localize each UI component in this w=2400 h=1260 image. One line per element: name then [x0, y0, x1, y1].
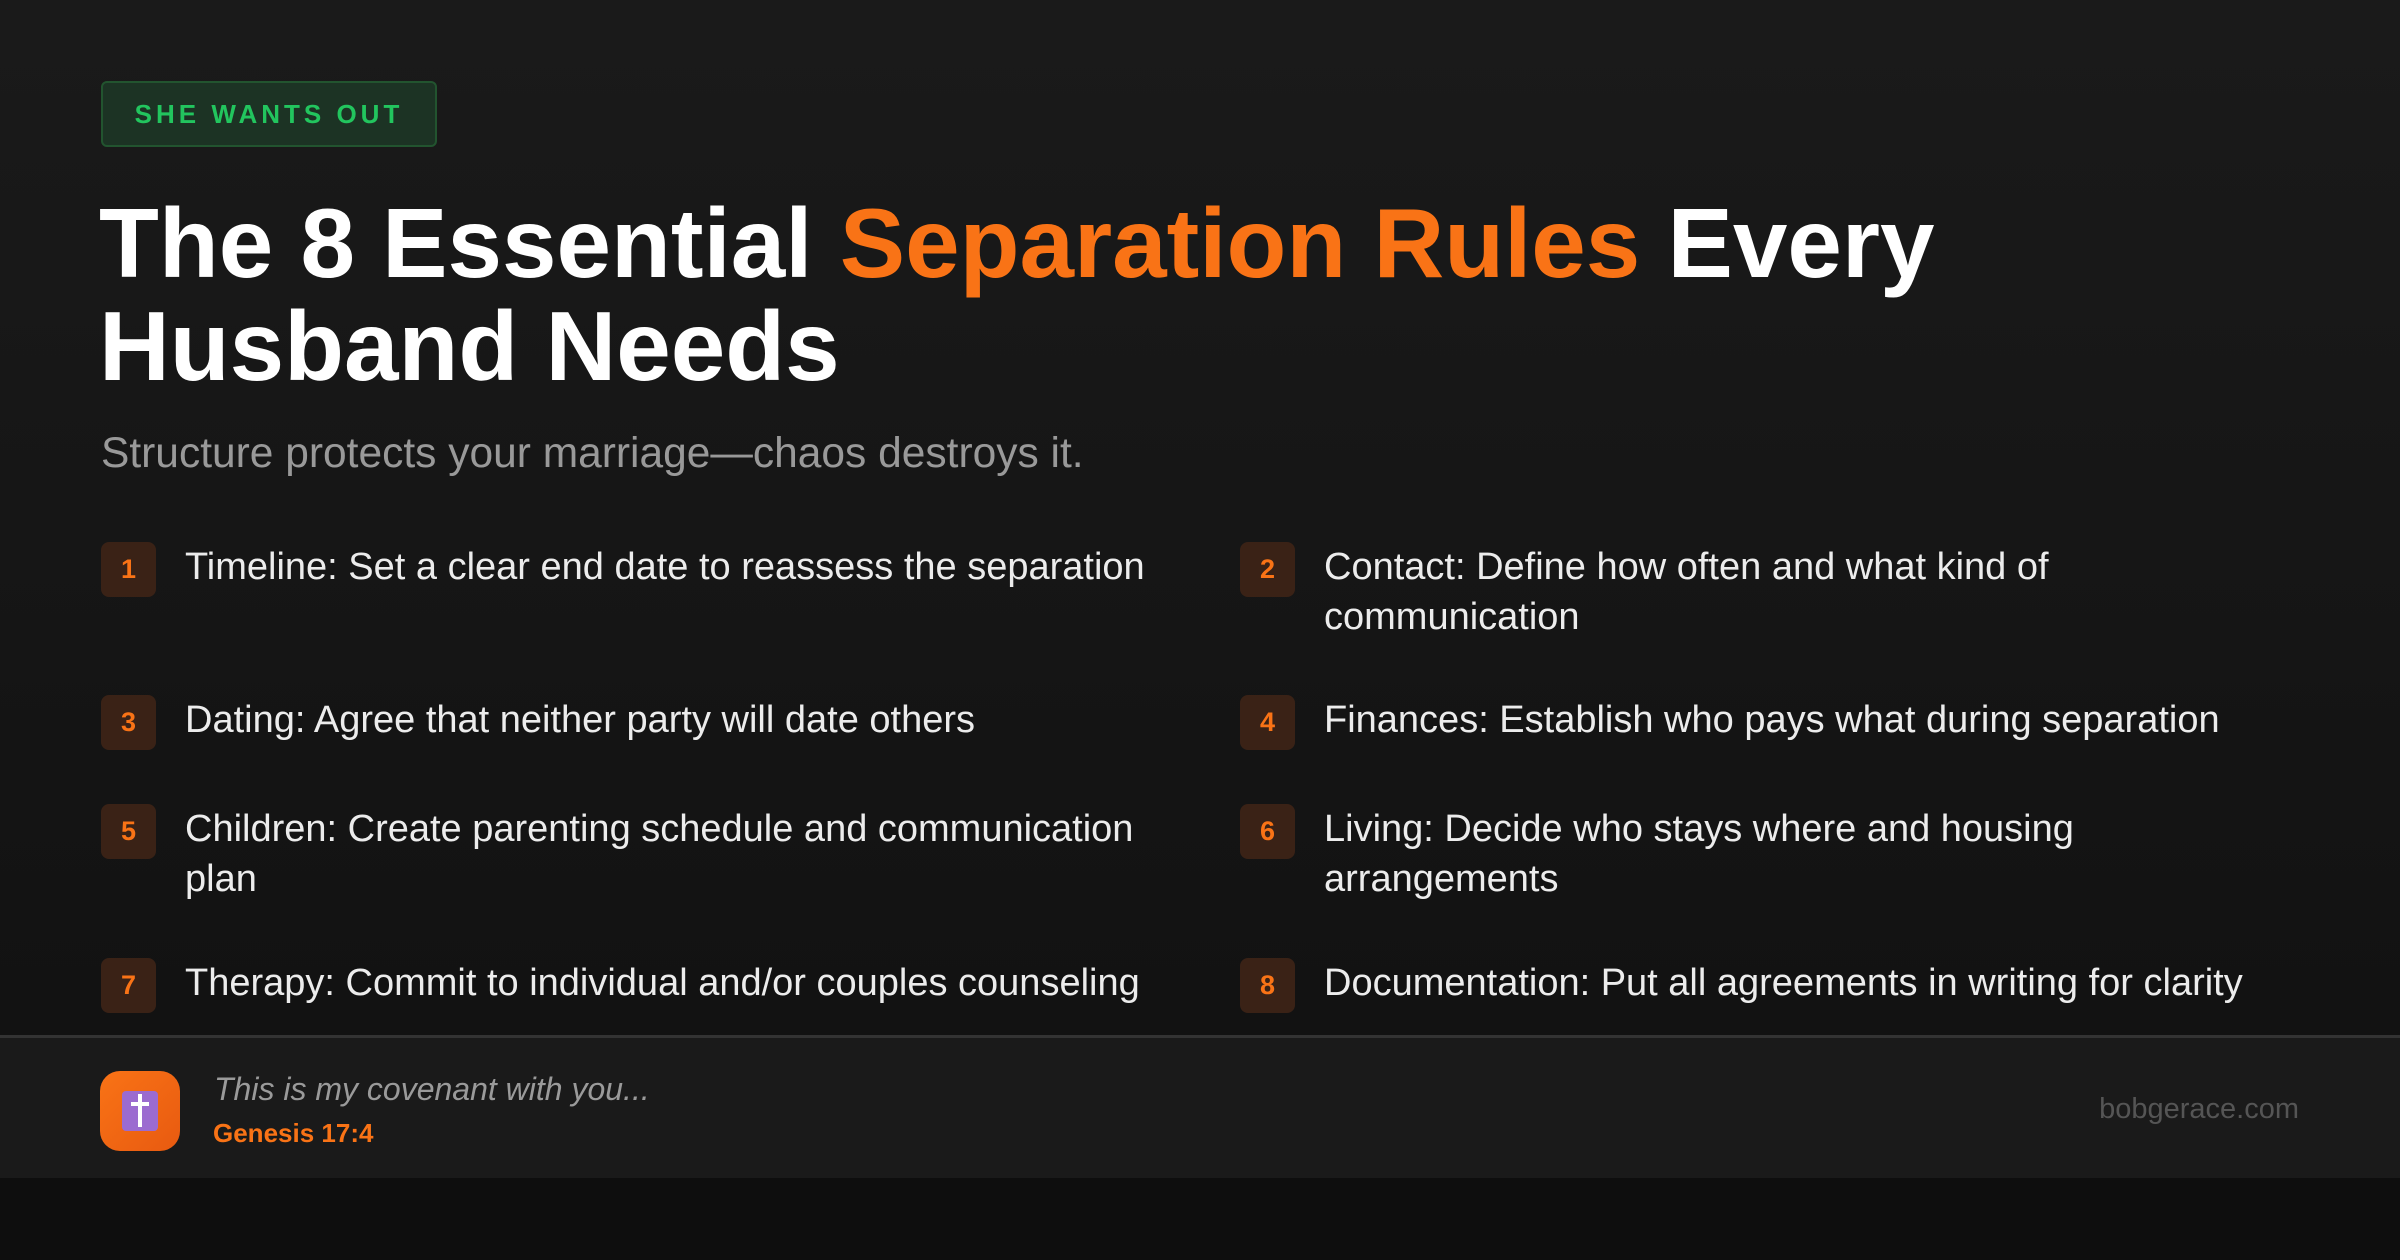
rule 8: Documentation: Put all agreements in writing for clarity — [1324, 962, 2243, 1004]
title: Husband Needs — [99, 291, 840, 401]
badge — [101, 81, 437, 147]
rule 1: Timeline: Set a clear end date to reassess the separation — [185, 546, 1145, 588]
site url: bobgerace.com — [2099, 1093, 2299, 1125]
icon: bible cross — [100, 1071, 180, 1151]
scripture reference: Genesis 17:4 — [213, 1118, 373, 1148]
rule 8: 8 — [1260, 970, 1275, 1000]
rule 3: Dating: Agree that neither party will date others — [185, 699, 975, 741]
rule 6: Living: Decide who stays where and housing — [1324, 808, 2074, 850]
rule 8 — [1240, 958, 2243, 1013]
rule 2 — [1240, 542, 2049, 638]
rule 6 — [1240, 804, 2074, 900]
rule 4 — [1240, 695, 2220, 750]
title: The 8 Essential Separation Rules Every — [99, 188, 1935, 298]
rule 3: 3 — [121, 707, 136, 737]
rule 5 — [101, 804, 1133, 900]
footer — [0, 1035, 2400, 1178]
rule 5: plan — [185, 858, 257, 900]
rule 4: 4 — [1260, 707, 1275, 737]
rule 1: 1 — [121, 554, 136, 584]
rule 2: communication — [1324, 596, 1580, 638]
quote: This is my covenant with you... — [214, 1071, 650, 1107]
rule 6: 6 — [1260, 816, 1275, 846]
rule 5: Children: Create parenting schedule and communication — [185, 808, 1133, 850]
rule 2: 2 — [1260, 554, 1275, 584]
badge: SHE WANTS OUT — [135, 98, 403, 128]
rule 4: Finances: Establish who pays what during separation — [1324, 699, 2220, 741]
rule 5: 5 — [121, 816, 136, 846]
title — [99, 188, 1935, 401]
rule 3 — [101, 695, 975, 750]
rule 7: Therapy: Commit to individual and/or couples counseling — [185, 962, 1140, 1004]
rule 2: Contact: Define how often and what kind of — [1324, 546, 2049, 588]
rule 6: arrangements — [1324, 858, 1558, 900]
rule 7: 7 — [121, 970, 136, 1000]
subtitle: Structure protects your marriage—chaos destroys it. — [101, 430, 1084, 477]
